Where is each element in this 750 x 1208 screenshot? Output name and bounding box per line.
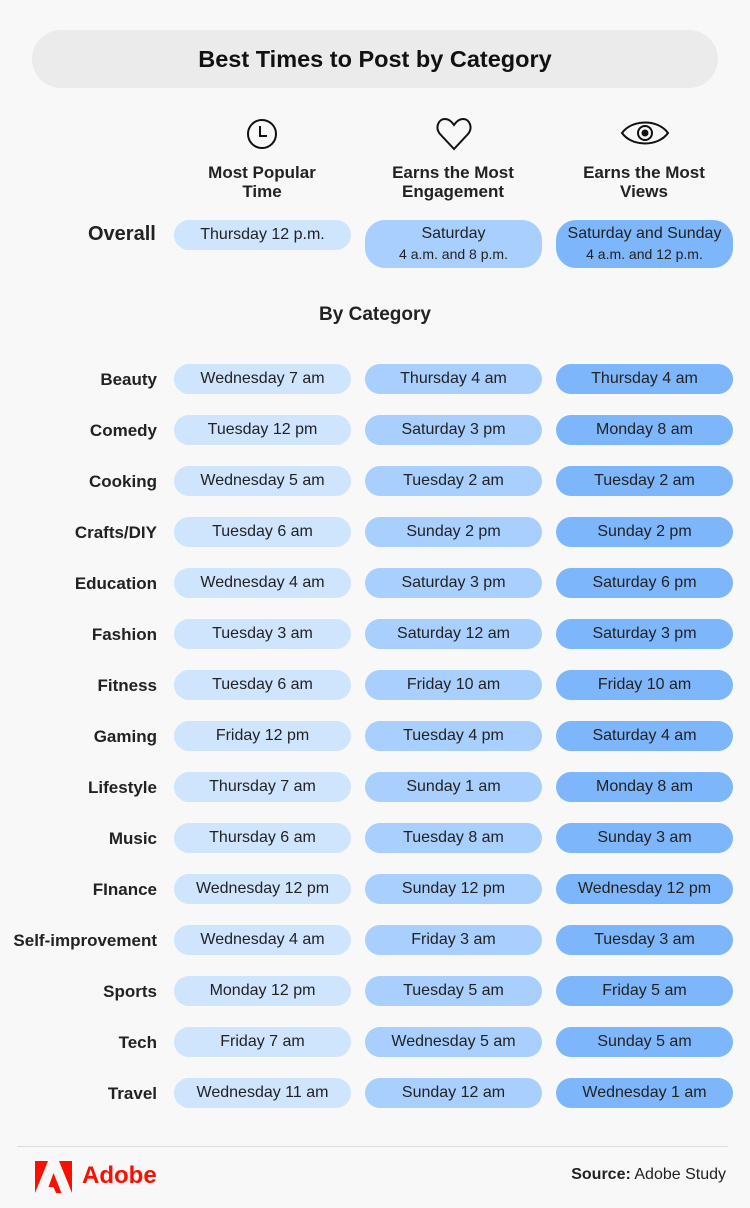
category table: Travel — [108, 1084, 157, 1103]
category table: Self-improvement — [13, 931, 157, 950]
category table: Wednesday 12 pm — [196, 880, 329, 897]
overall pill 2: Saturday — [421, 225, 486, 242]
category table: Sunday 3 am — [597, 829, 692, 846]
category table: Friday 7 am — [220, 1033, 305, 1050]
category table: Tuesday 12 pm — [208, 421, 317, 438]
category table: Tuesday 6 am — [212, 523, 313, 540]
category table: Wednesday 7 am — [200, 370, 325, 387]
category table: Saturday 4 am — [592, 727, 697, 744]
category table: Monday 12 pm — [210, 982, 315, 999]
category table: Friday 12 pm — [216, 727, 309, 744]
category table — [13, 364, 733, 1108]
icon: eye — [620, 122, 670, 144]
category table: Fashion — [92, 625, 157, 644]
category table: Tech — [119, 1033, 157, 1052]
category table: Thursday 6 am — [209, 829, 316, 846]
category table: Lifestyle — [88, 778, 157, 797]
category table: Wednesday 5 am — [200, 472, 325, 489]
overall pill 3: 4 a.m. and 12 p.m. — [586, 246, 703, 262]
category table: Friday 10 am — [407, 676, 500, 693]
category table: Thursday 4 am — [591, 370, 698, 387]
category table: Wednesday 4 am — [200, 574, 325, 591]
category table: Thursday 7 am — [209, 778, 316, 795]
category table: Music — [109, 829, 157, 848]
category table: Monday 8 am — [596, 778, 693, 795]
category table: Thursday 4 am — [400, 370, 507, 387]
category table: Tuesday 6 am — [212, 676, 313, 693]
category table: Wednesday 5 am — [391, 1033, 516, 1050]
category table: FInance — [93, 880, 157, 899]
category table: Friday 3 am — [411, 931, 496, 948]
overall pill 2: 4 a.m. and 8 p.m. — [399, 246, 508, 262]
header: views — [583, 163, 705, 201]
source: Source: Adobe Study — [571, 1166, 726, 1183]
category table: Sunday 12 am — [402, 1084, 505, 1101]
category table: Saturday 12 am — [397, 625, 510, 642]
header: engagement: Earns the Most — [392, 163, 514, 182]
category table: Fitness — [97, 676, 157, 695]
overall pill 2 — [365, 220, 542, 268]
logo: adobe — [35, 1161, 157, 1193]
icon: heart — [436, 118, 472, 150]
category table: Wednesday 4 am — [200, 931, 325, 948]
category table: Beauty — [100, 370, 157, 389]
title — [32, 30, 718, 88]
overall pill 1: Thursday 12 p.m. — [200, 226, 325, 243]
category table: Sunday 5 am — [597, 1033, 692, 1050]
category table: Sports — [103, 982, 157, 1001]
category table: Friday 10 am — [598, 676, 691, 693]
category table: Tuesday 4 pm — [403, 727, 504, 744]
category table: Tuesday 2 am — [594, 472, 695, 489]
category table: Sunday 2 pm — [406, 523, 501, 540]
category table: Wednesday 12 pm — [578, 880, 711, 897]
logo: adobe: Adobe — [82, 1162, 157, 1189]
category table: Wednesday 1 am — [582, 1084, 707, 1101]
overall pill 1 — [174, 220, 351, 250]
header: engagement — [392, 163, 514, 201]
title: Best Times to Post by Category — [198, 46, 552, 72]
category table: Saturday 6 pm — [592, 574, 697, 591]
category table: Tuesday 3 am — [594, 931, 695, 948]
header: most popular — [208, 163, 316, 201]
category table: Monday 8 am — [596, 421, 693, 438]
category table: Tuesday 8 am — [403, 829, 504, 846]
overall pill 3: Saturday and Sunday — [568, 225, 721, 242]
category table: Sunday 12 pm — [402, 880, 505, 897]
header: most popular: Time — [242, 182, 282, 201]
header: views: Views — [620, 182, 668, 201]
heading: by category: By Category — [319, 304, 431, 325]
label: overall: Overall — [88, 223, 156, 245]
category table: Tuesday 5 am — [403, 982, 504, 999]
category table: Education — [75, 574, 157, 593]
category table: Sunday 1 am — [406, 778, 501, 795]
category table: Crafts/DIY — [75, 523, 157, 542]
header: views: Earns the Most — [583, 163, 705, 182]
header: most popular: Most Popular — [208, 163, 316, 182]
category table: Wednesday 11 am — [197, 1084, 328, 1101]
header: engagement: Engagement — [402, 182, 504, 201]
icon: clock — [247, 119, 277, 149]
category table: Comedy — [90, 421, 157, 440]
category table: Saturday 3 pm — [592, 625, 697, 642]
category table: Tuesday 2 am — [403, 472, 504, 489]
category table: Friday 5 am — [602, 982, 687, 999]
category table: Cooking — [89, 472, 157, 491]
category table: Sunday 2 pm — [597, 523, 692, 540]
overall pill 3 — [556, 220, 733, 268]
category table: Tuesday 3 am — [212, 625, 313, 642]
category table: Gaming — [94, 727, 157, 746]
category table: Saturday 3 pm — [401, 574, 506, 591]
category table: Saturday 3 pm — [401, 421, 506, 438]
